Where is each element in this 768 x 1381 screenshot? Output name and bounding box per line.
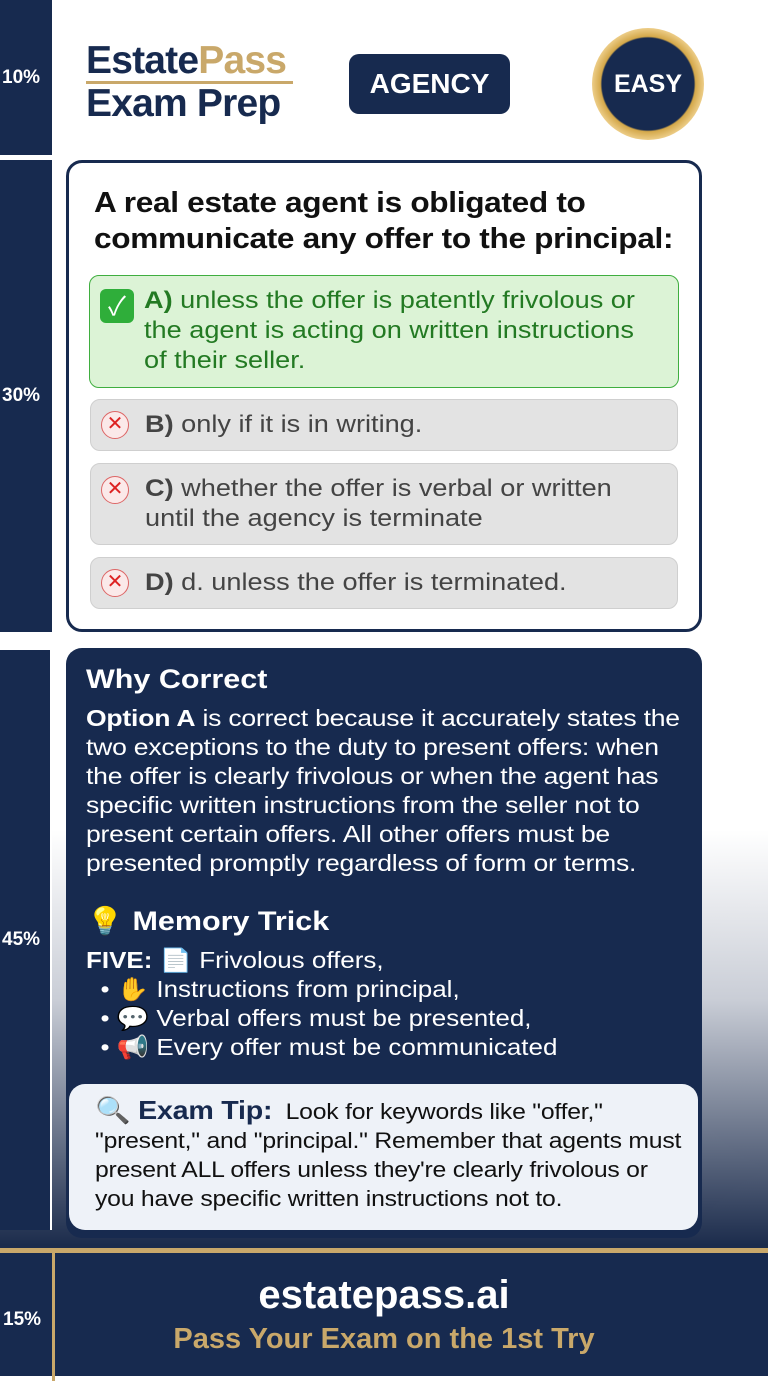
option D [90, 557, 678, 609]
bar: 10% [0, 0, 52, 155]
option A correct: A) unless the offer is patently frivolous or [144, 287, 635, 314]
logo: EstatePass Exam Prep [86, 39, 286, 125]
explanation text: present certain offers. All other offers must be [86, 821, 610, 847]
bar: 30%: 30% [2, 385, 40, 406]
option B: ✕ [107, 413, 123, 435]
option C: C) whether the offer is verbal or written [145, 475, 612, 502]
option D: ✕ [107, 571, 123, 593]
bar: 10%: 10% [2, 66, 40, 88]
question text: A real estate agent is obligated to [94, 187, 586, 219]
bar: 45%: 45% [2, 929, 40, 950]
bar: 45% [0, 650, 52, 1230]
exam tip box: you have specific written instructions not to. [95, 1186, 562, 1211]
exam tip box: "present," and "principal." Remember that agents must [95, 1128, 681, 1153]
option B: B) only if it is in writing. [145, 411, 422, 438]
exam tip box: 🔍 Exam Tip: Look for keywords like "offer," [95, 1095, 603, 1125]
option B [90, 399, 678, 451]
badge: AGENCY: AGENCY [370, 68, 489, 99]
explanation text: the offer is clearly frivolous or when the agent has [86, 763, 658, 789]
badge: EASY seal: EASY [614, 70, 682, 98]
explanation text: Option A is correct because it accurately states the [86, 705, 680, 731]
footer tagline: Pass Your Exam on the 1st Try [173, 1323, 595, 1355]
explanation text: two exceptions to the duty to present offers: when [86, 734, 659, 760]
option A correct: the agent is acting on written instructions [144, 317, 634, 344]
memory list: • 💬 Verbal offers must be presented, [100, 1005, 532, 1031]
footer url: estatepass.ai [258, 1273, 510, 1317]
question text: communicate any offer to the principal: [94, 223, 673, 255]
option A correct [89, 275, 679, 388]
question card [66, 160, 702, 632]
question text [94, 187, 673, 255]
option A correct: ✓ [108, 291, 126, 321]
footer label 15%: 15% [3, 1309, 41, 1330]
explanation panel [66, 648, 702, 1238]
exam tip box: present ALL offers unless they're clearly frivolous or [95, 1157, 648, 1182]
memory list [86, 947, 557, 1060]
explanation text [86, 705, 680, 876]
footer [0, 1248, 768, 1376]
option A correct: of their seller. [144, 347, 305, 374]
bar: 30% [0, 160, 52, 632]
exam tip box [69, 1084, 698, 1230]
option D: D) d. unless the offer is terminated. [145, 569, 567, 596]
option C [90, 463, 678, 545]
explanation text: presented promptly regardless of form or terms. [86, 850, 636, 876]
heading: memory trick: 💡 Memory Trick [86, 906, 329, 936]
memory list: • ✋ Instructions from principal, [100, 976, 460, 1002]
memory list: FIVE: 📄 Frivolous offers, [86, 947, 384, 973]
badge: AGENCY [349, 54, 510, 114]
option C: ✕ [107, 478, 123, 500]
option C: until the agency is terminate [145, 505, 483, 532]
explanation text: specific written instructions from the seller not to [86, 792, 640, 818]
memory list: • 📢 Every offer must be communicated [100, 1034, 557, 1060]
heading: why correct: Why Correct [86, 664, 267, 694]
badge: EASY seal [592, 28, 704, 140]
